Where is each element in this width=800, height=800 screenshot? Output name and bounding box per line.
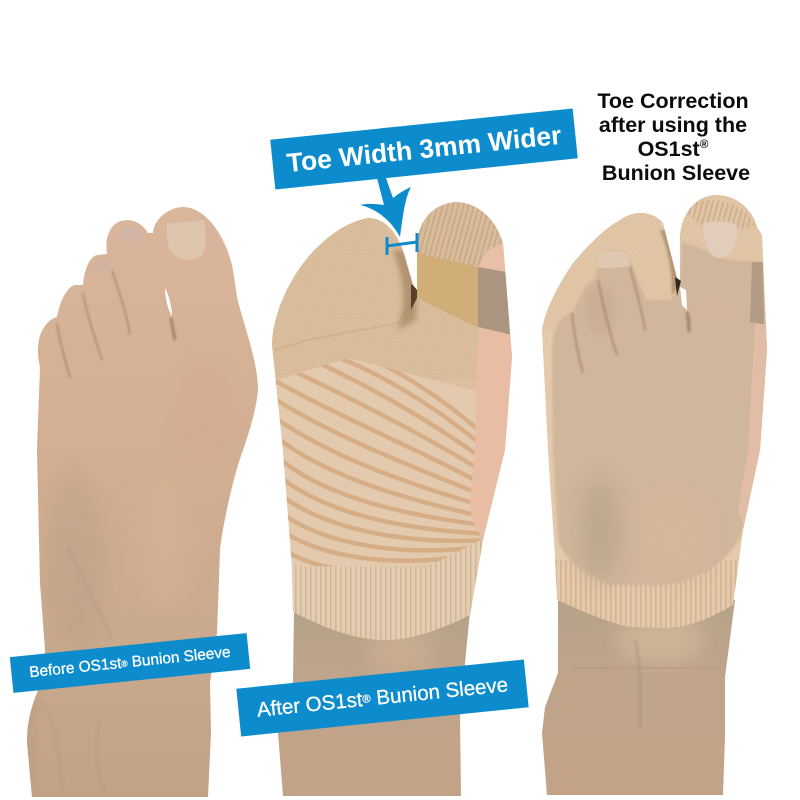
banner: after label: [236, 659, 529, 736]
toe crevices: [57, 270, 175, 378]
heading: toe correction: Bunion Sleeve: [602, 161, 750, 185]
photo: leg above middle sleeve: [278, 610, 470, 796]
arrow: points at toe gap: [360, 178, 417, 255]
heading: toe correction: after using the: [599, 113, 747, 137]
photo: bare foot before sleeve: [27, 207, 258, 797]
banner: before label: Before OS1st Bunion Sleeve: [29, 644, 231, 681]
gap between toes: [680, 287, 687, 310]
gap between toes: [165, 288, 172, 316]
toe shadow: [392, 250, 416, 330]
ankle band ribs: [555, 560, 736, 628]
heading: toe correction: OS1st®: [638, 137, 708, 161]
banner: toe width: [270, 109, 578, 189]
banner: toe width: Toe Width 3mm Wider: [285, 119, 563, 178]
nails: [703, 221, 737, 258]
right pink strip: [738, 323, 768, 530]
photo: foot wearing sleeve: [265, 200, 515, 640]
banner: after label: After OS1st Bunion Sleeve: [256, 673, 509, 721]
stripe knit zone: [276, 358, 480, 566]
banner: before label: [10, 633, 250, 693]
photo: leg below sheer foot: [542, 598, 735, 795]
kinesio strips: [417, 253, 478, 328]
heading: toe correction: [597, 89, 750, 185]
ankle band: [285, 538, 485, 640]
photo: foot with sheer sleeve showing corrected toes: [540, 190, 770, 635]
toe crevices: [572, 267, 689, 373]
toe ridges: [417, 202, 503, 267]
heading: toe correction: Toe Correction: [597, 89, 749, 113]
skin seen through sleeve: [552, 242, 768, 585]
toenails: [92, 220, 205, 273]
gray strip edge: [750, 262, 764, 325]
banner: after label: ®: [362, 693, 371, 706]
banner: before label: ®: [121, 658, 128, 669]
